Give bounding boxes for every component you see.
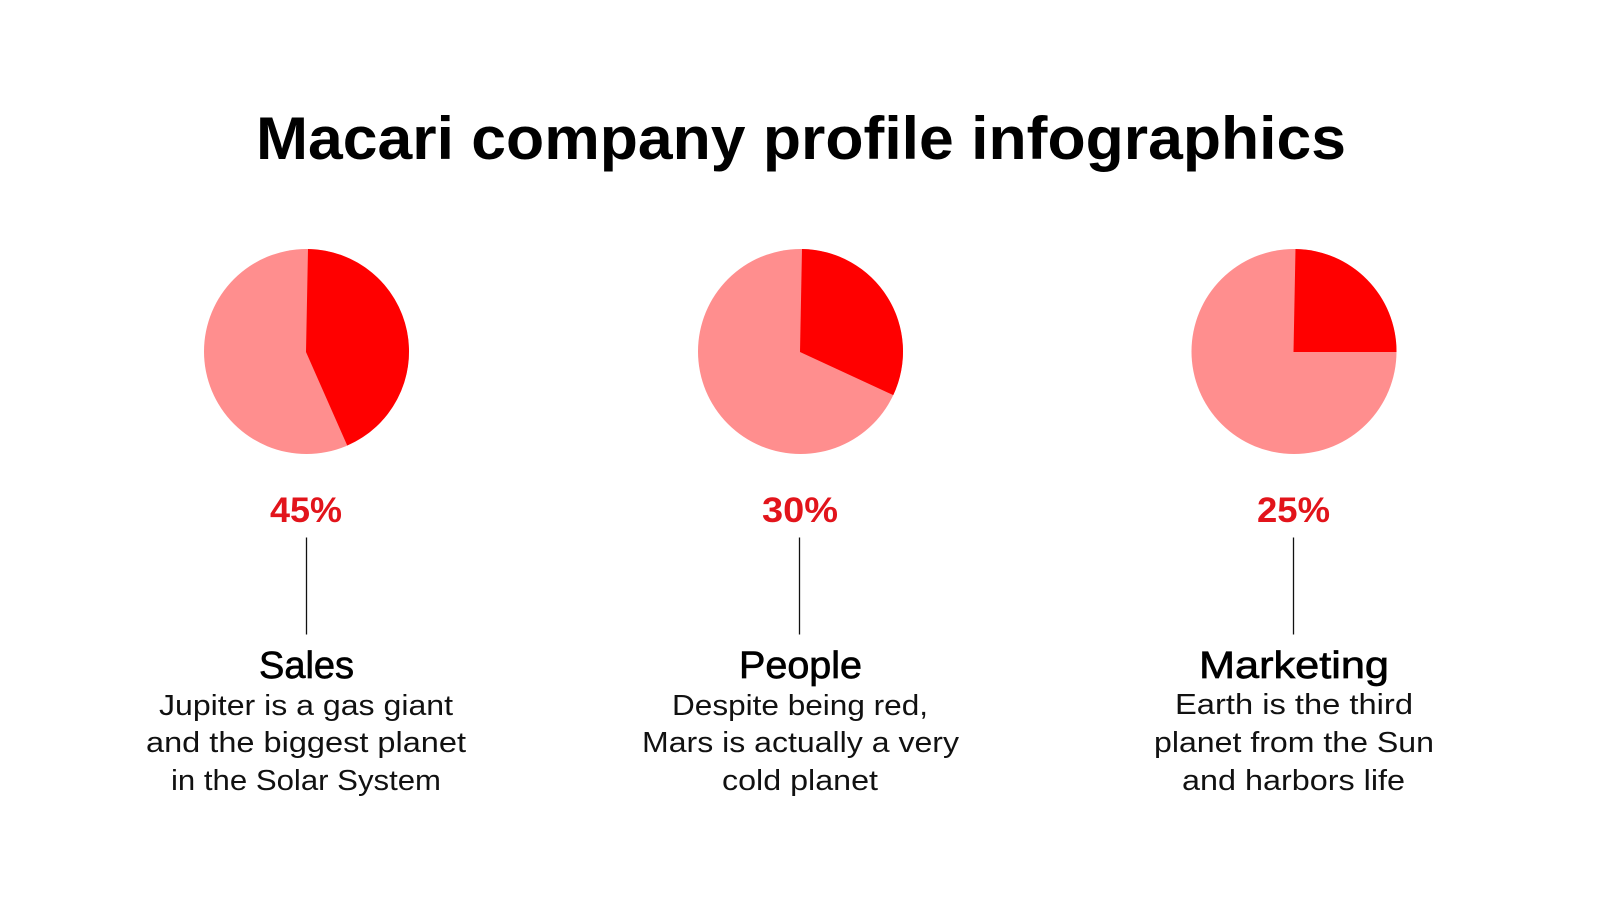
marketing description: planet from the Sun <box>1154 727 1434 759</box>
sales connector line <box>306 538 308 634</box>
marketing heading: Marketing <box>1199 645 1389 687</box>
sales description: in the Solar System <box>171 765 441 797</box>
sales percentage: 45% <box>270 491 342 530</box>
sales description <box>146 690 466 797</box>
sales description: Jupiter is a gas giant <box>159 690 453 722</box>
pie chart: marketing 25% <box>1192 249 1397 454</box>
people percentage: 30% <box>762 491 838 530</box>
panel: marketing <box>1154 249 1434 797</box>
pie chart: sales 45% <box>204 249 409 454</box>
people connector line <box>798 538 800 634</box>
people description: cold planet <box>722 765 878 797</box>
pie chart: people 30% <box>698 249 903 454</box>
sales heading: Sales <box>259 645 354 687</box>
people heading: People <box>739 645 862 687</box>
sales description: and the biggest planet <box>146 727 466 759</box>
panel: people <box>642 249 960 797</box>
marketing description: and harbors life <box>1182 765 1405 797</box>
panel: sales <box>146 249 466 797</box>
marketing description <box>1154 689 1434 797</box>
people description: Mars is actually a very <box>642 727 960 759</box>
title: Macari company profile infographics <box>256 105 1346 172</box>
people description <box>642 690 960 797</box>
marketing percentage: 25% <box>1257 491 1330 530</box>
marketing connector line <box>1292 538 1294 634</box>
marketing description: Earth is the third <box>1175 689 1413 721</box>
people description: Despite being red, <box>672 690 928 722</box>
